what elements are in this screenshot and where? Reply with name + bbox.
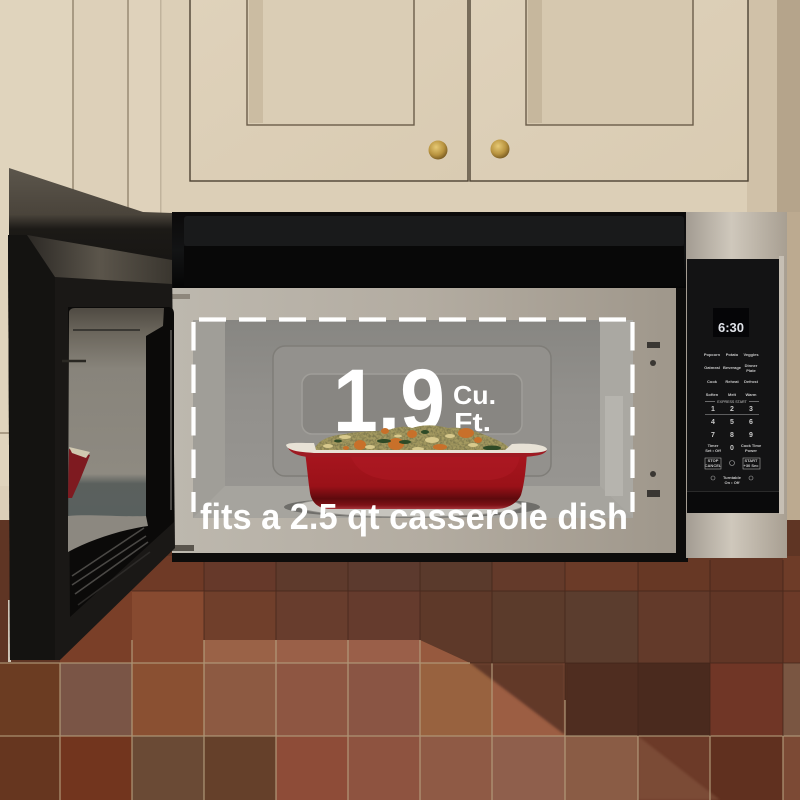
steel trim	[686, 212, 787, 558]
row 3	[0, 663, 60, 736]
keypad labels: 3	[749, 406, 753, 413]
wall and cabinet background	[0, 0, 800, 522]
dish rim and handles	[286, 443, 547, 453]
microwave body	[172, 212, 787, 562]
door lower glass slats	[72, 528, 150, 605]
door glass reflection	[62, 308, 172, 552]
keypad labels: Set • Off	[705, 448, 721, 453]
keypad labels: 9	[749, 432, 753, 439]
control column	[686, 212, 787, 558]
keypad labels: Cook	[707, 379, 718, 384]
keypad labels: START	[744, 458, 758, 463]
door face	[8, 235, 175, 660]
keypad labels: Soften	[706, 392, 719, 397]
keypad labels: 6	[749, 419, 753, 426]
keypad labels	[704, 352, 762, 485]
dish body	[305, 452, 527, 509]
keypad labels: 4	[711, 419, 715, 426]
keypad labels: CANCEL	[705, 463, 722, 468]
keypad labels: +30 Sec	[743, 463, 759, 468]
door window surround	[68, 307, 174, 617]
keypad labels: Reheat	[725, 379, 739, 384]
door top edge	[9, 168, 172, 290]
keypad labels: 1	[711, 406, 715, 413]
icon: brass knob left	[428, 140, 448, 160]
casserole dish with food	[286, 425, 547, 509]
keypad labels: Popcorn	[704, 352, 721, 357]
door left frame	[8, 235, 55, 660]
keypad labels: Dinner	[745, 363, 758, 368]
keypad labels: 0	[730, 445, 734, 452]
keypad labels: Power	[745, 448, 757, 453]
keypad labels: On • Off	[725, 480, 740, 485]
keypad labels: Beverage	[723, 365, 742, 370]
keypad labels: EXPRESS START	[717, 400, 748, 404]
display	[713, 308, 749, 337]
open microwave door	[8, 168, 175, 660]
keypad labels: Melt	[728, 392, 737, 397]
caption: fits a 2.5 qt casserole dish: fits a 2.5 qt casserole dish	[200, 496, 628, 537]
keypad labels: Veggies	[743, 352, 759, 357]
keypad labels: Plate	[746, 368, 757, 373]
terracotta tile backsplash	[0, 520, 800, 800]
keypad labels: 8	[730, 432, 734, 439]
keypad labels: Oatmeal	[704, 365, 720, 370]
keypad labels: STOP	[708, 458, 719, 463]
keypad labels: Cook Time	[741, 443, 762, 448]
keypad labels: Defrost	[744, 379, 759, 384]
keypad labels: Warm	[746, 392, 757, 397]
row 2	[60, 591, 132, 663]
diagonal shadow	[470, 663, 565, 735]
cabinet door: right	[470, 0, 748, 181]
turntable	[284, 496, 540, 518]
oven interior	[193, 320, 633, 518]
keypad labels: Turntable	[723, 475, 742, 480]
dimension text: 1.9 Cu. Ft.: Ft.	[454, 407, 491, 437]
keypad labels: 5	[730, 419, 734, 426]
keypad labels: 7	[711, 432, 715, 439]
grout lines	[0, 640, 800, 800]
dashed capacity outline	[194, 320, 632, 512]
food mound	[314, 425, 512, 451]
door upper bevel	[27, 235, 172, 284]
row 4	[0, 736, 60, 800]
keypad labels: Potato	[726, 352, 739, 357]
black control panel	[687, 259, 779, 513]
cavity frame	[172, 288, 676, 553]
cabinet door: left	[190, 0, 468, 181]
top vent band	[172, 213, 686, 288]
display: 6:30	[718, 320, 744, 335]
dimension text: 1.9 Cu. Ft.: Cu.	[453, 380, 496, 410]
icon: brass knob right	[490, 140, 510, 158]
latch hardware	[172, 294, 660, 551]
keypad labels: 2	[730, 406, 734, 413]
row 1	[132, 556, 204, 591]
keypad labels: Timer	[708, 443, 719, 448]
dimension text: 1.9 Cu. Ft.: 1.9	[333, 350, 445, 450]
